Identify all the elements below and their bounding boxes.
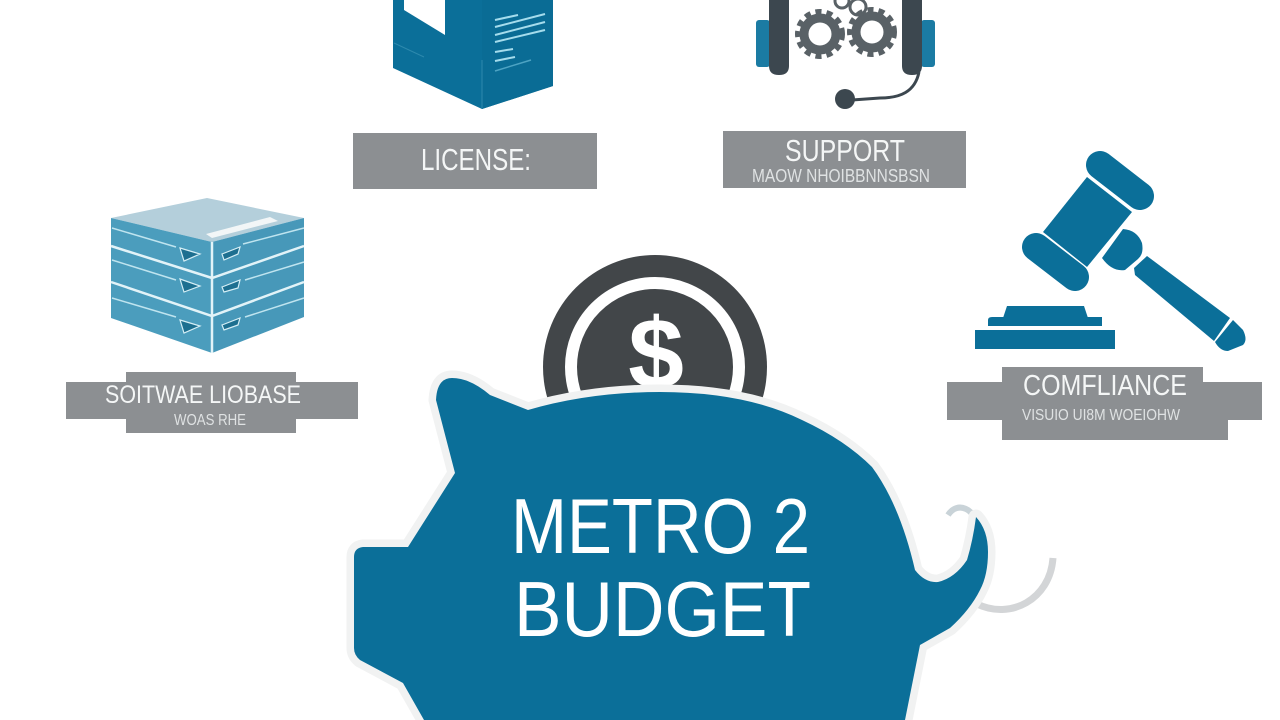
icon: dollar coin [543,255,767,479]
label: compliance: COMFLIANCE [1023,370,1187,402]
title: metro 2 budget: BUDGET [514,565,811,653]
label: license [353,133,597,189]
label: compliance: VISUIO UI8M WOEIOHW [1022,407,1181,424]
label: license: LICENSE: [421,142,531,177]
label: support: SUPPORT [785,133,905,168]
icon: support headset with gears [756,0,935,109]
icon: dollar coin: $ [628,298,684,410]
icon: compliance gavel [975,165,1246,351]
label: software license: WOAS RHE [174,412,246,429]
title: metro 2 budget [511,482,811,653]
decoration: curly tail ring [948,508,1053,609]
label: software license [66,372,358,433]
icon: license box [393,0,553,109]
label: software license: SOITWAE LIOBASE [105,381,301,409]
icon: software license server stack [111,198,304,353]
label: support [723,131,966,188]
label: support: MAOW NHOIBBNNSBSN [752,166,930,186]
piggy bank body [354,378,988,720]
title: metro 2 budget: METRO 2 [511,482,810,570]
label: compliance [947,367,1262,440]
